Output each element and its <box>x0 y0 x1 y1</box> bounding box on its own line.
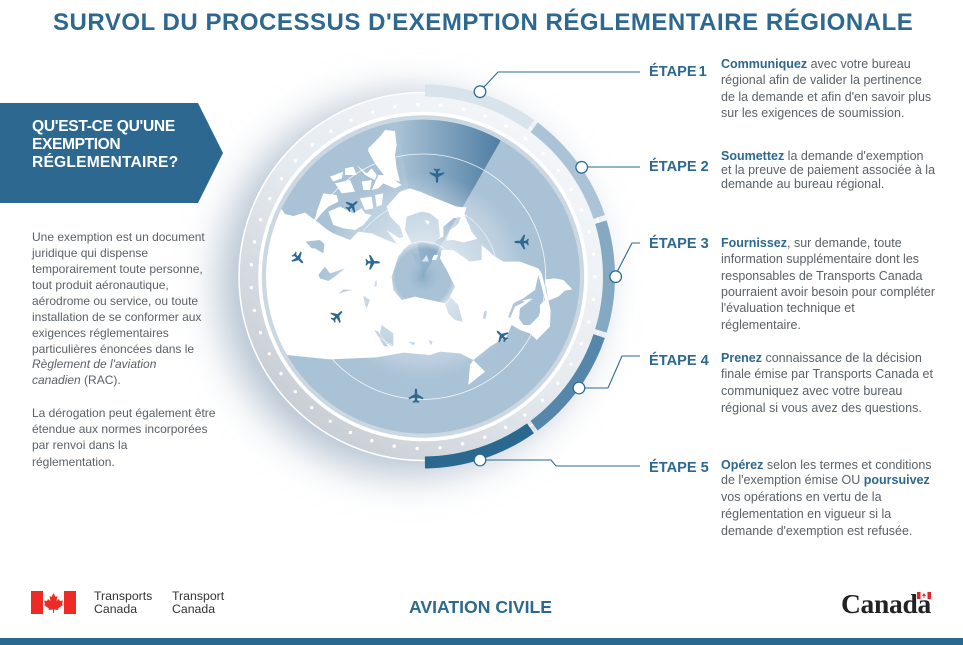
step 2 text: Soumettez la demande d'exemption <box>721 149 924 163</box>
step 3 text: responsables de Transports Canada <box>721 269 923 283</box>
step 1 label: ÉTAPE 1 <box>649 64 707 80</box>
outer ring <box>239 92 607 460</box>
footer bar <box>0 638 963 645</box>
small islands <box>422 220 532 302</box>
text block: definition: Règlement de l'aviation <box>32 357 156 371</box>
Transports Canada (French): Transports <box>94 589 152 603</box>
radar sweep <box>396 110 501 277</box>
map of Canada <box>250 110 580 434</box>
panel: question banner <box>0 103 223 203</box>
text block: definition: Une exemption est un document <box>32 230 205 244</box>
text block: definition <box>32 230 215 469</box>
step 4 label: ÉTAPE 4 <box>649 353 709 369</box>
radar diagram <box>196 72 640 498</box>
step 5 text: de l'exemption émise OU poursuivez <box>721 473 930 487</box>
step 4 text: finale émise par Transports Canada et <box>721 367 933 381</box>
leader lines <box>484 72 640 466</box>
step 4 text: Prenez connaissance de la décision <box>721 351 922 365</box>
panel: question banner: RÉGLEMENTAIRE? <box>32 154 178 171</box>
step nodes <box>474 86 622 466</box>
step 1 text: sur les exigences de soumission. <box>721 106 904 120</box>
step 1 text: Communiquez avec votre bureau <box>721 57 911 71</box>
step 3 text: information supplémentaire dont les <box>721 252 919 266</box>
step 3 text: pourraient avoir besoin pour compléter <box>721 285 935 299</box>
text block: definition: aérodrome ou service, ou toute <box>32 294 198 308</box>
Transport Canada (English) <box>172 589 224 616</box>
text block: definition: étendue aux normes incorporées <box>32 422 207 436</box>
text block: definition: installation de se conformer aux <box>32 310 201 324</box>
step 3 label: ÉTAPE 3 <box>649 236 709 252</box>
Transport Canada (English): Transport <box>172 589 224 603</box>
step 2 text <box>721 149 936 191</box>
step 4 text: régional si vous avez des questions. <box>721 401 922 415</box>
step 3 text <box>721 236 935 332</box>
step 3 text: réglementaire. <box>721 318 801 332</box>
radar rings <box>300 154 546 399</box>
footer heading: AVIATION CIVILE <box>409 597 552 617</box>
shadow glow <box>219 95 599 475</box>
step 4 text <box>721 351 933 415</box>
airplanes <box>289 168 529 403</box>
step 3 text: Fournissez, sur demande, toute <box>721 236 902 250</box>
text block: definition: réglementation. <box>32 455 115 469</box>
step 5 text <box>721 458 932 538</box>
step 5 text: demande d'exemption est refusée. <box>721 524 912 538</box>
title: SURVOL DU PROCESSUS D'EXEMPTION RÉGLEMENTAIRE RÉGIONALE <box>53 9 913 36</box>
panel: question banner: EXEMPTION <box>32 136 120 153</box>
Transports Canada (French): Canada <box>94 602 137 616</box>
progress arcs <box>237 90 609 462</box>
step 2 label: ÉTAPE 2 <box>649 159 709 175</box>
text block: definition: tout produit aéronautique, <box>32 278 169 292</box>
text block: definition: temporairement toute personne, <box>32 262 203 276</box>
step 1 text: régional afin de valider la pertinence <box>721 73 922 87</box>
Canadian flag signature <box>31 591 76 614</box>
centre glow <box>329 180 516 370</box>
panel: question banner: QU'EST-CE QU'UNE <box>32 118 175 135</box>
step 2 text: et la preuve de paiement associée à la <box>721 163 935 177</box>
step 1 text <box>721 57 931 120</box>
step 5 text: Opérez selon les termes et conditions <box>721 458 932 472</box>
step 5 text: réglementation en vigueur si la <box>721 507 891 521</box>
step 2 text: demande au bureau régional. <box>721 177 884 191</box>
Transports Canada (French) <box>94 589 152 616</box>
inner white ring <box>260 114 586 440</box>
step 5 label: ÉTAPE 5 <box>649 460 709 476</box>
lakes, basins and gulf <box>306 212 545 347</box>
step 1 text: de la demande et afin d'en savoir plus <box>721 90 931 104</box>
text block: definition: par renvoi dans la <box>32 438 127 452</box>
radar centre <box>422 255 434 262</box>
text block: definition: exigences réglementaires <box>32 326 169 340</box>
dotted ring <box>251 104 595 448</box>
Transport Canada (English): Canada <box>172 602 215 616</box>
text block: definition: particulières énoncées dans le <box>32 342 194 356</box>
text block: definition: canadien (RAC). <box>32 373 121 387</box>
step 4 text: communiquez avec votre bureau <box>721 384 902 398</box>
text block: definition: juridique qui dispense <box>32 246 148 260</box>
land <box>250 130 572 385</box>
text block: definition: La dérogation peut également être <box>32 406 215 420</box>
step 5 text: vos opérations en vertu de la <box>721 490 882 504</box>
step 3 text: l'évaluation technique et <box>721 301 855 315</box>
Canada wordmark: Canada <box>841 588 931 619</box>
